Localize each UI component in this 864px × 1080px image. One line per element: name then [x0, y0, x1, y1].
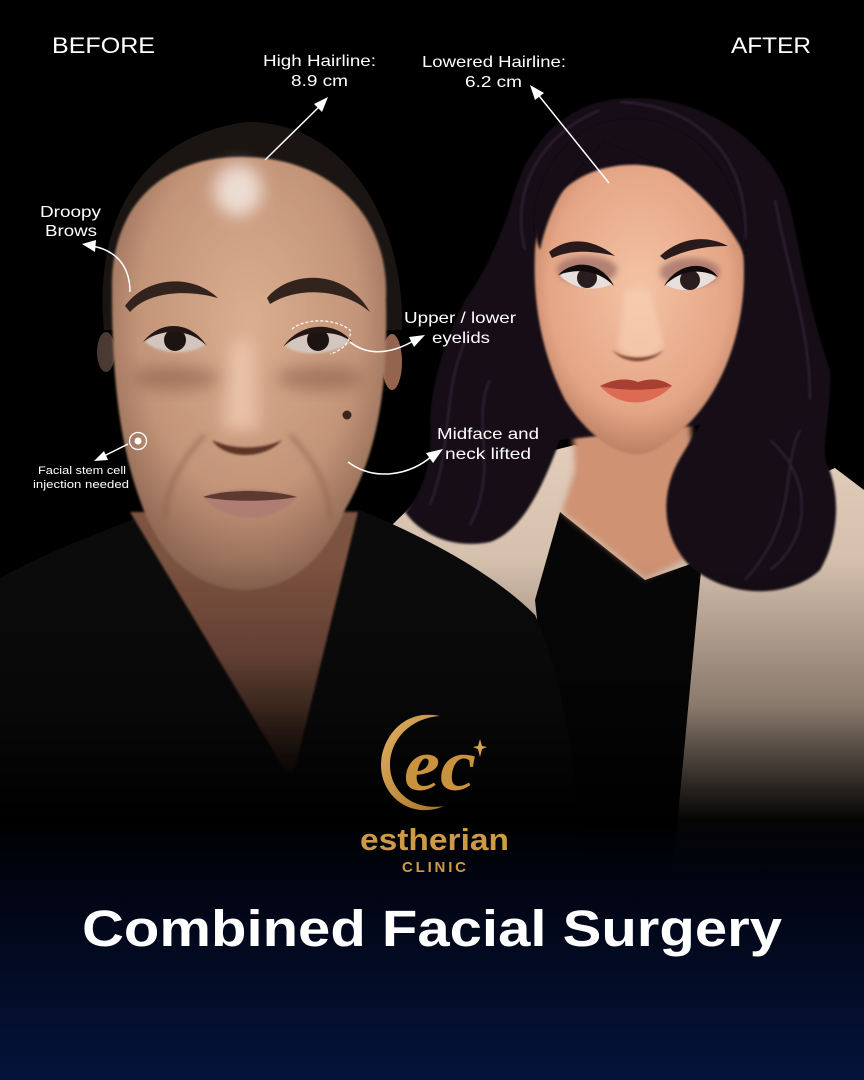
callout: stem cell injection: injection needed: [33, 479, 129, 491]
logo: crescent: [381, 715, 444, 810]
after: hair highlights: [430, 102, 810, 580]
logo: monogram: ec: [404, 725, 476, 807]
callout: lowered hairline: 6.2 cm: [465, 74, 522, 91]
after: brows: [549, 241, 615, 258]
after: fringe: [535, 119, 745, 255]
callout: midface and neck: neck lifted: [445, 446, 531, 463]
before: nose highlight: [222, 340, 260, 430]
label: before: BEFORE: [52, 33, 155, 58]
before: nasolabial folds: [165, 435, 330, 520]
title: Combined Facial Surgery: [82, 900, 783, 957]
before: forehead highlight: [214, 164, 262, 216]
before: hair: [103, 122, 402, 330]
after: neck and chest: [562, 420, 702, 578]
callout: eyelids: [292, 310, 517, 354]
portrait: after: [392, 98, 864, 880]
callout: high hairline: 8.9 cm: [291, 73, 348, 90]
before: shoulders: [0, 510, 580, 880]
label: after: AFTER: [731, 33, 811, 58]
logo: estherian clinic: [360, 715, 509, 876]
before: mole: [342, 410, 352, 420]
after: nose: [618, 290, 664, 358]
before: nose: [212, 440, 282, 455]
before: eyes: [145, 329, 205, 352]
before: ears: [97, 332, 115, 372]
callout: droopy brows: Droopy: [40, 204, 101, 221]
callout: lowered hairline: Lowered Hairline:: [422, 54, 566, 71]
before: brows: [125, 281, 218, 312]
before: under eye shadows: [131, 366, 219, 390]
callout: droopy brows: [40, 204, 130, 292]
after: eyes: [560, 267, 612, 289]
after: lips: [600, 380, 672, 402]
callout: high hairline: [263, 53, 376, 160]
after: hair: [405, 98, 836, 591]
before: neck: [130, 512, 358, 772]
after: black top: [535, 512, 702, 880]
callout: midface and neck: [348, 426, 539, 474]
before: lips: [203, 490, 297, 518]
callout: stem cell injection: [33, 432, 146, 491]
logo: clinic: CLINIC: [402, 859, 466, 876]
callout: high hairline: High Hairline:: [263, 53, 376, 70]
logo: star: [473, 739, 487, 757]
callout: eyelids: eyelids: [432, 330, 490, 347]
callout: droopy brows: Brows: [45, 223, 97, 240]
callout: lowered hairline: [422, 54, 609, 183]
after: face: [535, 165, 744, 454]
logo: wordmark: estherian: [360, 822, 509, 857]
portrait: before: [0, 122, 580, 880]
after: eye makeup: [557, 256, 617, 284]
callout: midface and neck: Midface and: [437, 426, 539, 443]
bottom fade: [0, 560, 864, 1080]
before: face: [112, 157, 386, 590]
callout: stem cell injection: Facial stem cell: [38, 465, 126, 477]
after: blazer: [392, 445, 864, 880]
callout: eyelids: Upper / lower: [404, 310, 517, 327]
